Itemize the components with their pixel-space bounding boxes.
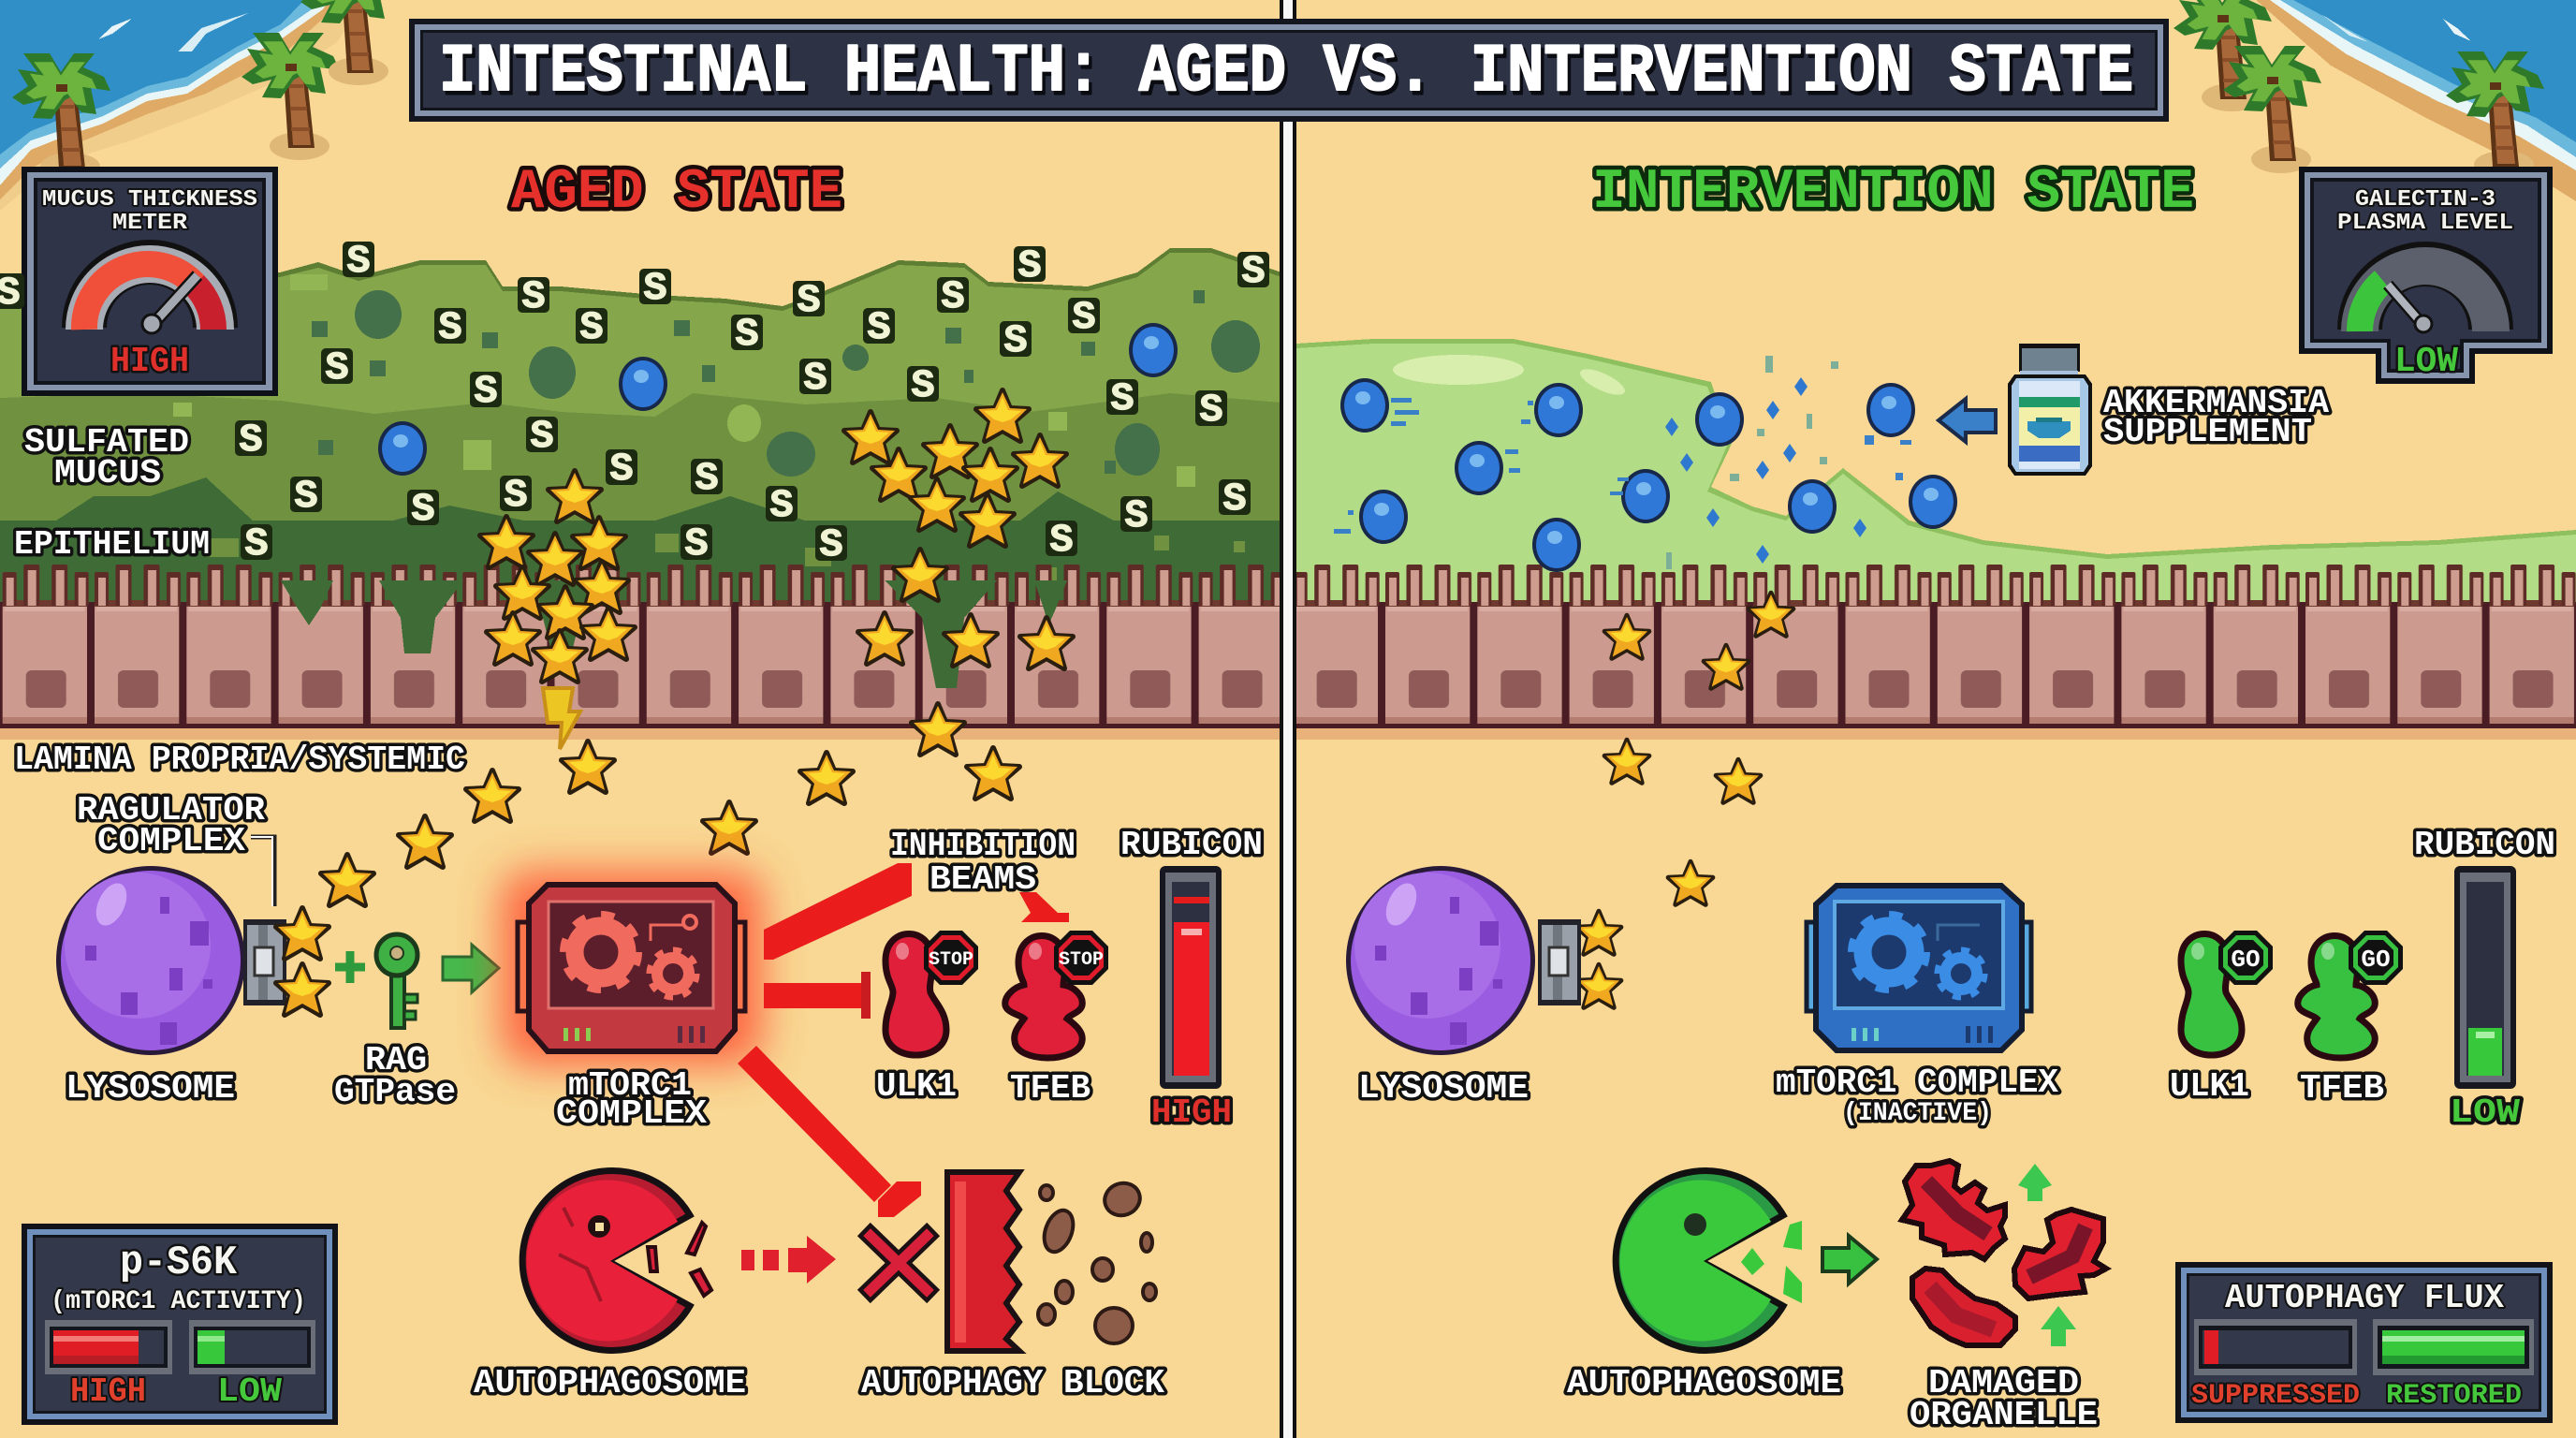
label: mtorc1 complex inactive: mTORC1 COMPLEX	[1776, 1064, 2058, 1102]
ragulator connector aged	[243, 919, 286, 1005]
label: akkermansia supplement: AKKERMANSIA	[2103, 384, 2329, 422]
panel title: AUTOPHAGY FLUX	[2225, 1279, 2504, 1317]
panel title: p-S6K	[120, 1240, 238, 1286]
debris	[1038, 1179, 1156, 1343]
rubicon bar low	[2454, 866, 2516, 1089]
palm trees left	[12, 0, 399, 181]
go sign: GO	[2231, 946, 2261, 974]
label: damaged organelle	[1910, 1364, 2098, 1434]
sulfate markers: S	[474, 369, 498, 414]
beach top left	[0, 0, 365, 211]
label: damaged organelle: ORGANELLE	[1910, 1396, 2098, 1434]
label: sulfated mucus: SULFATED	[24, 423, 189, 462]
aged state mucus layer	[0, 248, 1281, 609]
label: damaged organelle: DAMAGED	[1928, 1364, 2079, 1402]
label: sulfated mucus	[24, 423, 189, 492]
ragulator connector intervention	[1538, 919, 1581, 1005]
bar low	[189, 1320, 315, 1374]
sulfate markers: S	[438, 305, 462, 350]
sulfate markers	[0, 239, 1269, 567]
gauge value: LOW	[2394, 342, 2458, 382]
label: sulfated mucus: MUCUS	[54, 454, 161, 492]
sulfate markers: S	[735, 312, 759, 357]
dashed arrow blocked	[741, 1236, 836, 1284]
vertical divider	[1280, 0, 1296, 1438]
sulfate markers: S	[769, 483, 794, 528]
sulfate markers: S	[1017, 243, 1042, 288]
shards	[648, 1223, 711, 1296]
label: inhibition beams	[890, 827, 1076, 899]
bar high	[45, 1320, 172, 1374]
protein tfeb inhibited	[1005, 931, 1108, 1058]
palm trees right	[2174, 0, 2544, 179]
label: ragulator complex	[77, 791, 274, 906]
bar restored	[2373, 1319, 2534, 1375]
label: mtorc1 complex inactive: (INACTIVE)	[1843, 1099, 1992, 1128]
label: ragulator complex: COMPLEX	[97, 822, 245, 860]
protein ulk1 active	[2181, 931, 2273, 1055]
heading: intervention state: INTERVENTION STATE	[1592, 161, 2194, 225]
gauge dial	[84, 262, 215, 333]
panel subtitle: (mTORC1 ACTIVITY)	[51, 1287, 306, 1316]
sulfate markers: S	[609, 447, 634, 492]
sulfate markers: S	[867, 305, 891, 350]
sulfate markers: S	[695, 456, 719, 501]
label: lysosome: LYSOSOME	[66, 1069, 235, 1108]
stop sign: STOP	[1059, 949, 1104, 971]
sulfate markers: S	[521, 274, 546, 319]
sulfate markers: S	[803, 356, 827, 401]
label: mtorc1 complex	[556, 1066, 707, 1133]
sulfate markers: S	[579, 305, 604, 350]
title banner: INTESTINAL HEALTH: AGED VS. INTERVENTION STATE	[442, 37, 2136, 114]
organelle upper left	[1902, 1161, 2005, 1259]
sulfate markers: S	[530, 414, 554, 459]
label: rag gtpase: GTPase	[334, 1073, 456, 1111]
bar suppressed	[2194, 1319, 2357, 1375]
bacteria in aged mucus	[378, 323, 1178, 476]
sulfate markers: S	[1049, 518, 1074, 563]
sulfate markers: S	[1199, 388, 1223, 433]
sulfate markers: S	[294, 474, 318, 519]
stars intervention state	[1576, 593, 1793, 1007]
lightning leak	[543, 688, 580, 749]
epithelium cell row intervention	[1291, 565, 2576, 740]
label: tfeb: TFEB	[1010, 1069, 1090, 1108]
label: mtorc1 complex inactive	[1776, 1064, 2058, 1128]
icon: autophagosome intervention	[1616, 1170, 1802, 1351]
title banner	[409, 19, 2169, 122]
label: epithelium: EPITHELIUM	[14, 525, 210, 564]
gears	[564, 916, 696, 997]
heading: aged state: AGED STATE	[511, 161, 842, 225]
sulfate markers: S	[1124, 493, 1149, 538]
icon: rag key	[376, 934, 417, 1028]
value restored: RESTORED	[2386, 1380, 2522, 1412]
sulfate markers: S	[1072, 295, 1096, 340]
protein tfeb active	[2298, 931, 2403, 1058]
label: autophagosome aged: AUTOPHAGOSOME	[474, 1364, 746, 1402]
lysosome aged	[56, 866, 245, 1055]
inhibition beams	[738, 863, 1069, 1217]
rubicon bar high	[1160, 866, 1222, 1089]
sulfate markers: S	[325, 345, 349, 390]
protein ulk1 inhibited	[886, 931, 978, 1055]
go sign: GO	[2361, 946, 2391, 974]
gears	[1852, 916, 1984, 997]
label: ulk1 intervention: ULK1	[2170, 1067, 2249, 1106]
value low: LOW	[217, 1372, 282, 1411]
gauge label: MUCUS THICKNESS	[42, 187, 257, 213]
sulfate markers: S	[244, 521, 269, 566]
sulfate markers: S	[239, 418, 263, 462]
panel: galectin-3 plasma level	[2299, 167, 2553, 384]
sulfate markers: S	[797, 278, 821, 323]
intervention state mucus layer	[1296, 339, 2576, 609]
beach top right	[2256, 0, 2576, 201]
label: autophagosome intervention: AUTOPHAGOSOME	[1567, 1364, 1841, 1402]
label: ragulator complex: RAGULATOR	[77, 791, 265, 829]
icon: supplement bottle	[2008, 344, 2092, 476]
x block mark	[871, 1236, 927, 1290]
label: mtorc1 complex: mTORC1	[568, 1066, 692, 1105]
sulfate markers: S	[941, 274, 965, 319]
stars leaking in aged state	[276, 390, 1073, 1015]
label: akkermansia supplement	[2103, 384, 2329, 451]
label: rubicon high: HIGH	[1151, 1093, 1232, 1132]
sulfate markers: S	[819, 522, 843, 567]
gauge label second line: METER	[112, 211, 188, 236]
gauge label: GALECTIN-3	[2355, 187, 2496, 213]
plus sign	[335, 951, 365, 983]
sulfate markers: S	[1222, 477, 1247, 521]
icon: autophagosome aged	[522, 1170, 711, 1351]
sulfate markers: S	[1241, 249, 1266, 294]
sulfate markers: S	[1110, 376, 1134, 421]
label: rubicon aged: RUBICON	[1120, 826, 1263, 864]
panel: autophagy flux	[2175, 1262, 2553, 1423]
sulfate markers: S	[411, 487, 435, 532]
label: inhibition beams: INHIBITION	[890, 827, 1076, 865]
label: rubicon intervention: RUBICON	[2414, 826, 2555, 864]
gauge value: HIGH	[110, 342, 189, 382]
mtorc1 complex active	[518, 885, 745, 1051]
icon: damaged organelles	[1902, 1161, 2106, 1345]
label: akkermansia supplement: SUPPLEMENT	[2103, 413, 2312, 451]
bacteria in intervention mucus	[1334, 356, 1957, 572]
label: ulk1: ULK1	[876, 1067, 957, 1106]
label: lysosome intervention: LYSOSOME	[1358, 1069, 1529, 1108]
sulfate markers: S	[346, 239, 371, 284]
lysosome intervention	[1346, 866, 1535, 1055]
panel: mucus thickness meter	[22, 167, 278, 396]
sulfate markers: S	[1003, 318, 1028, 363]
sulfate markers: S	[504, 473, 528, 518]
label: tfeb intervention: TFEB	[2300, 1069, 2384, 1108]
green fragments	[1741, 1221, 1802, 1303]
value high: HIGH	[70, 1372, 146, 1411]
arrow to organelles	[1822, 1236, 1877, 1284]
mtorc1 complex inactive	[1807, 886, 2031, 1050]
label: mtorc1 complex: COMPLEX	[556, 1094, 707, 1133]
stop sign: STOP	[929, 949, 973, 971]
label: inhibition beams: BEAMS	[929, 860, 1036, 899]
mucus drips into the epithelium	[281, 580, 1067, 688]
label: rag gtpase	[334, 1041, 456, 1111]
sulfate markers: S	[684, 521, 709, 566]
sulfate markers: S	[911, 363, 935, 408]
panel: p-s6k	[22, 1224, 338, 1425]
gauge label second line: PLASMA LEVEL	[2337, 211, 2513, 236]
label: lamina propria systemic: LAMINA PROPRIA/SYSTEMIC	[14, 741, 465, 779]
value suppressed: SUPPRESSED	[2191, 1380, 2360, 1412]
label: rubicon low: LOW	[2450, 1093, 2520, 1132]
organelle right	[2014, 1210, 2106, 1299]
autophagy block wall	[947, 1172, 1019, 1351]
gauge dial	[2360, 264, 2491, 332]
sulfate markers: S	[643, 266, 667, 311]
green restoration arrows	[2018, 1164, 2076, 1346]
akkermansia arrow	[1939, 399, 1996, 442]
arrow to mtorc1	[443, 945, 499, 992]
label: rag gtpase: RAG	[365, 1041, 427, 1079]
label: autophagy block: AUTOPHAGY BLOCK	[861, 1364, 1164, 1402]
epithelium cell row aged	[0, 565, 1280, 740]
title banner: INTESTINAL HEALTH: AGED VS. INTERVENTION STATE	[439, 34, 2133, 110]
mtorc1 glow	[501, 871, 763, 1065]
organelle lower left	[1912, 1269, 2015, 1345]
